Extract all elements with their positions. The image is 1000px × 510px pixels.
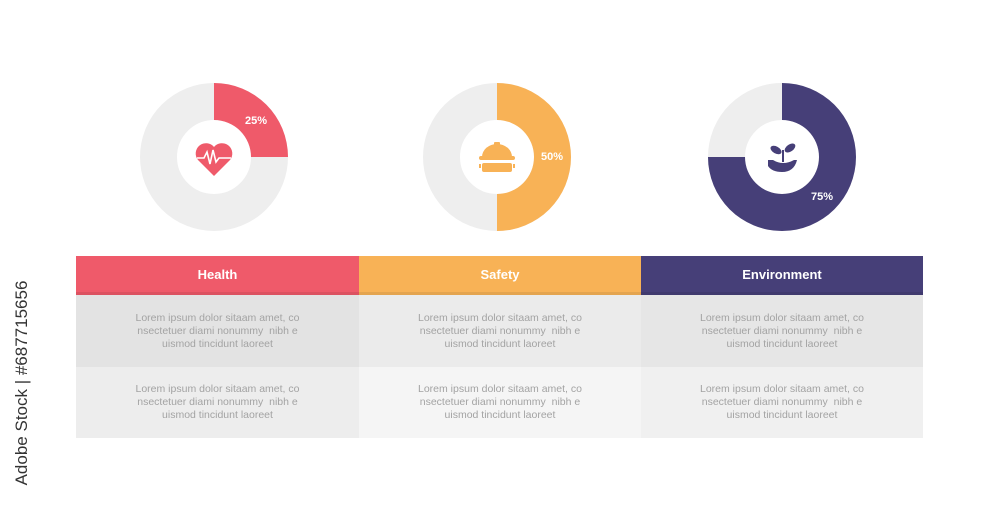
row 2 cells: Lorem ipsum dolor sitaam amet, co [136, 383, 299, 395]
donut: safety 50% [442, 83, 571, 231]
row 1 cells: nsectetuer diami nonummy nibh e [137, 324, 298, 336]
row 2 cells: nsectetuer diami nonummy nibh e [137, 396, 298, 408]
row 1 cells: uismod tincidunt laoreet [162, 338, 273, 350]
header: Environment: Environment [742, 267, 822, 282]
table: nsectetuer diami nonummy nibh e [420, 396, 580, 408]
donut charts [140, 83, 856, 231]
donut: environment 75% [708, 83, 856, 231]
icon: plant in hand [768, 142, 797, 172]
table [76, 256, 923, 438]
row 2 cells: uismod tincidunt laoreet [162, 409, 273, 421]
row 1 cells [76, 295, 359, 367]
table: Lorem ipsum dolor sitaam amet, co [418, 312, 582, 324]
table: Lorem ipsum dolor sitaam amet, co [418, 383, 582, 395]
donut: environment 75%: 75% [811, 191, 833, 203]
table: nsectetuer diami nonummy nibh e [702, 324, 862, 336]
donut: safety 50%: 50% [541, 151, 563, 163]
donut: health 25% [158, 83, 288, 212]
icon: helmet [479, 142, 515, 172]
icon: heart [196, 143, 232, 176]
header: Environment [641, 256, 923, 295]
header: Safety [359, 256, 641, 295]
table: Lorem ipsum dolor sitaam amet, co [700, 383, 864, 395]
header: Health: Health [198, 267, 237, 282]
header: Safety: Safety [480, 267, 520, 282]
table: uismod tincidunt laoreet [727, 338, 837, 350]
header: Health [76, 256, 359, 295]
donut: health 25%: 25% [245, 115, 267, 127]
table: nsectetuer diami nonummy nibh e [702, 396, 862, 408]
table: uismod tincidunt laoreet [727, 409, 837, 421]
table: Lorem ipsum dolor sitaam amet, co [700, 312, 864, 324]
table: uismod tincidunt laoreet [445, 338, 555, 350]
watermark side text: Adobe Stock | #687715656 [12, 281, 31, 485]
table: nsectetuer diami nonummy nibh e [420, 324, 580, 336]
row 2 cells [76, 367, 359, 438]
table: uismod tincidunt laoreet [445, 409, 555, 421]
row 1 cells: Lorem ipsum dolor sitaam amet, co [136, 312, 299, 324]
